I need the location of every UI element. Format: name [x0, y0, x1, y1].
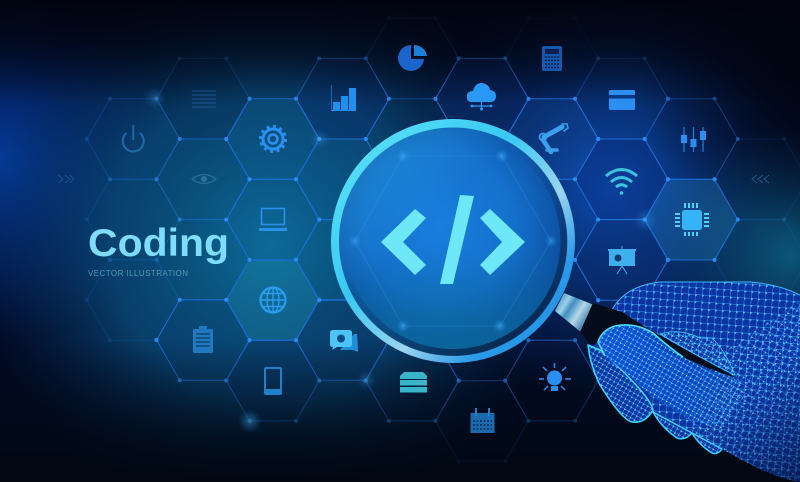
icon: presentation board — [608, 246, 636, 274]
icon: server — [400, 372, 427, 392]
front finger — [598, 325, 745, 430]
lens dark bevel — [342, 130, 564, 352]
subtitle: VECTOR ILLUSTRATION — [88, 269, 188, 278]
icon: globe — [260, 288, 286, 312]
icon: video chat — [330, 330, 358, 352]
icon: microchip — [675, 203, 709, 236]
thumb patch — [660, 332, 735, 375]
icon: calculator — [542, 46, 562, 71]
icon: calendar — [470, 408, 494, 433]
black grip and blade — [580, 303, 737, 378]
icon: cloud network — [467, 83, 496, 110]
icon: power — [123, 125, 144, 152]
second finger — [588, 345, 653, 422]
icon: list — [192, 91, 216, 107]
magnifier collar — [555, 293, 594, 333]
icon: light bulb — [539, 363, 571, 391]
lens sheen — [339, 128, 567, 356]
code symbol — [381, 195, 525, 284]
icon: credit card — [609, 90, 635, 110]
lens ring — [331, 119, 575, 363]
icon: double arrows left — [752, 175, 769, 183]
wireframe hand — [580, 282, 800, 482]
title: Coding — [88, 222, 229, 265]
icon: eye — [192, 174, 216, 184]
lens lower tint — [339, 128, 567, 356]
hand silhouette — [588, 282, 800, 482]
node glows — [144, 87, 657, 433]
icon: clipboard — [193, 326, 213, 353]
icon: pie chart — [398, 45, 427, 71]
icon: gear — [260, 126, 286, 152]
icon: tablet — [265, 368, 281, 394]
ring finger — [653, 412, 692, 439]
icon: wifi — [606, 170, 637, 195]
icon: sliders — [681, 127, 706, 152]
icon: robot arm — [540, 124, 568, 152]
icon: double arrows right — [58, 175, 74, 183]
icon: bar chart — [331, 85, 356, 111]
icon: laptop — [259, 208, 287, 230]
lower finger — [692, 433, 722, 454]
lens glass — [339, 128, 567, 356]
hex lines in lens — [348, 149, 558, 333]
magnifying glass — [331, 119, 575, 363]
